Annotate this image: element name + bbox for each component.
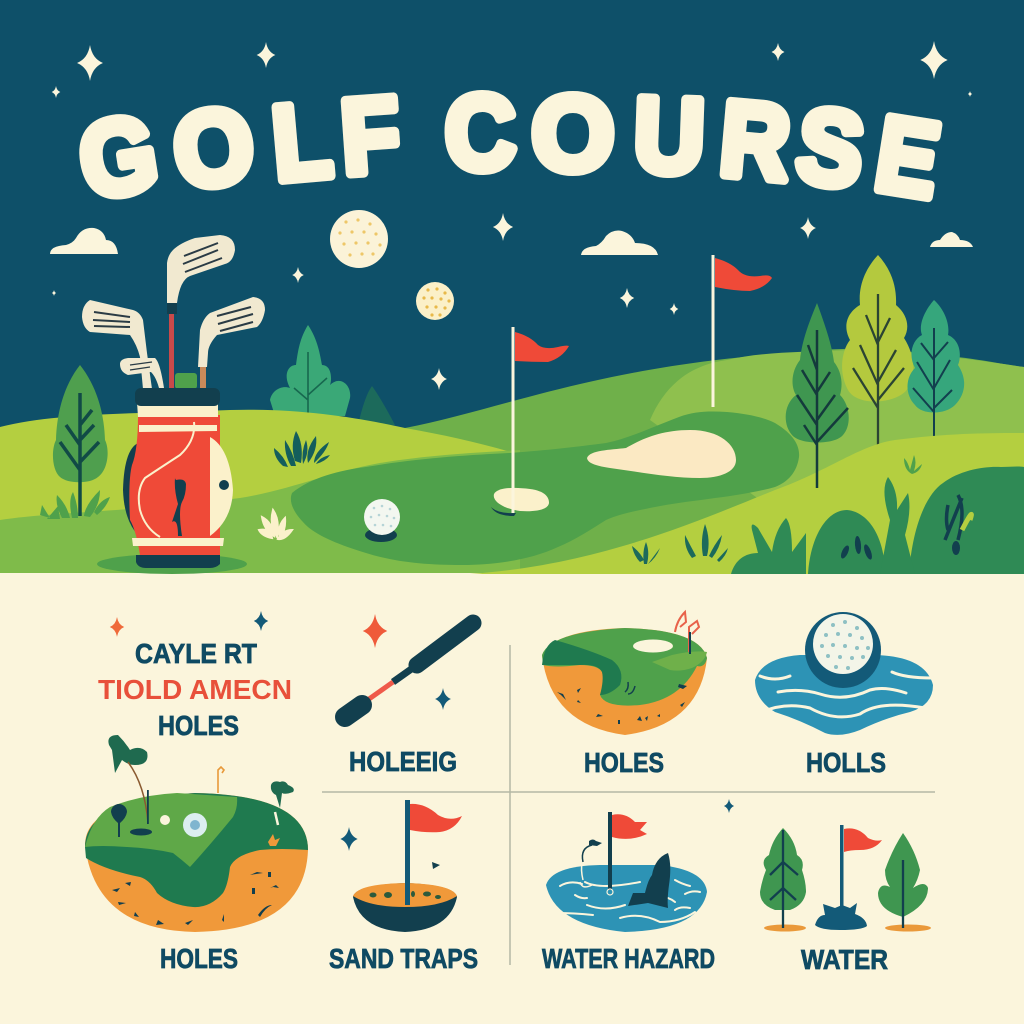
dividers (322, 645, 935, 965)
label: water hazard: WATER HAZARD (542, 943, 715, 974)
bag lower band (132, 538, 224, 546)
background teal bush (270, 325, 395, 425)
flag: near hole (512, 327, 569, 513)
tree: teal (908, 300, 964, 466)
club: centre iron (167, 235, 235, 389)
bag bottom (136, 555, 220, 568)
sand bunker (587, 430, 736, 478)
grass tufts right (632, 455, 922, 564)
back hill (300, 349, 1024, 573)
label: holeeig: HOLEEIG (349, 746, 457, 777)
label: water: WATER (801, 944, 888, 975)
icon: ball in water (755, 612, 933, 735)
sky stars (52, 41, 972, 390)
title: R (716, 80, 795, 203)
title: O (167, 85, 260, 212)
title: U (632, 75, 707, 196)
bag cream band (137, 402, 218, 417)
title: C (444, 73, 517, 193)
label: sand traps: SAND TRAPS (329, 943, 478, 974)
golf ball moon small (416, 282, 454, 320)
panel: night sky background (0, 0, 1024, 574)
icon: course island large (85, 735, 308, 932)
club: right iron (198, 297, 265, 389)
clouds (50, 228, 973, 255)
bushes bottom right (731, 467, 1024, 574)
golf ball on fairway (364, 499, 400, 542)
flag: far hole (712, 255, 772, 407)
label: holes center: HOLES (584, 747, 664, 778)
club: small iron (120, 358, 164, 388)
fairway green (291, 412, 799, 565)
cream flower (259, 510, 292, 539)
lower left green hill (0, 450, 520, 573)
lower stars (110, 611, 734, 851)
bag body (129, 415, 220, 555)
tree: green front (786, 303, 849, 488)
golf ball moon large (330, 210, 388, 268)
icon: trees and flag (760, 825, 931, 932)
icon: sand trap flag (353, 800, 462, 932)
bag side pocket (123, 443, 138, 535)
heading text: cayle rt: CAYLE RT (135, 638, 257, 669)
tree: left green (53, 365, 108, 516)
bag right pocket (210, 437, 233, 536)
front yellow-green hill (470, 433, 1024, 574)
grass tuft left (40, 490, 110, 519)
title: G (72, 92, 165, 222)
lighter hill patch (650, 350, 1024, 500)
club: green handle (175, 373, 197, 389)
icon: course island right (542, 612, 707, 735)
club: left iron (82, 300, 152, 389)
hole shadow (491, 507, 516, 516)
label: holls: HOLLS (806, 747, 886, 778)
icon: water hazard (546, 812, 707, 932)
title: S (791, 85, 870, 211)
heading text: holes: HOLES (158, 710, 239, 741)
title: O (532, 75, 614, 193)
label: holes lower left: HOLES (160, 943, 238, 974)
bag zipper pull (172, 478, 186, 536)
bag pocket button (219, 480, 229, 490)
bag shadow (97, 554, 247, 574)
grass tuft left hill (274, 431, 330, 467)
bag top rim (135, 388, 220, 406)
title (72, 73, 947, 222)
tree: yellow-green (842, 255, 913, 446)
putting green patch (494, 488, 549, 511)
golf bag with clubs (82, 235, 265, 574)
title: E (868, 94, 947, 220)
panel: cream lower background (0, 573, 1024, 1024)
title: L (268, 81, 336, 204)
icon: golf club (345, 623, 473, 717)
island tree with flag (108, 735, 148, 773)
title: F (337, 76, 404, 197)
heading text: tiold amecn: TIOLD AMECN (98, 674, 292, 705)
left yellow-green hill (0, 410, 530, 530)
bag stitching (139, 422, 194, 537)
